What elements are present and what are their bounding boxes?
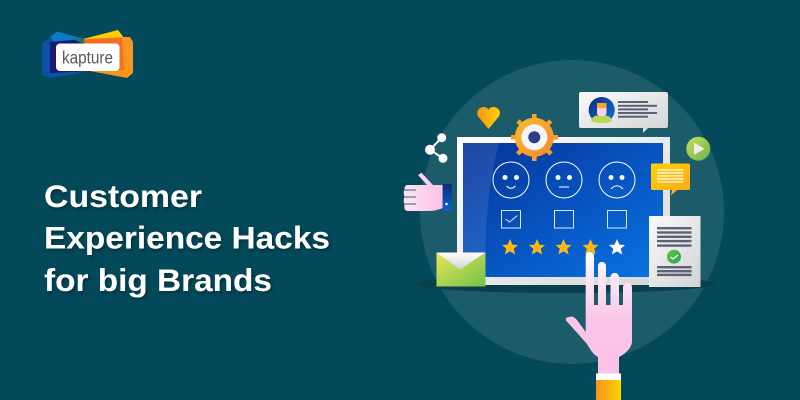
monitor [457, 137, 670, 285]
logo wordmark: kapture [62, 47, 113, 67]
title: for big Brands [44, 262, 272, 298]
check badge [667, 250, 681, 264]
left hand [404, 173, 452, 211]
yellow chat bubble [651, 164, 690, 196]
icon: gear [511, 114, 558, 161]
face: happy [493, 162, 529, 198]
speech bubble with avatar [579, 92, 668, 133]
icon: envelope [436, 252, 486, 286]
face: neutral [546, 162, 582, 198]
icon: share [425, 133, 448, 163]
logo plate [56, 44, 120, 71]
checkbox: empty right [608, 210, 626, 228]
checkbox: empty middle [554, 210, 574, 228]
sleeve [596, 380, 621, 400]
backdrop circle [420, 60, 724, 364]
title: Experience Hacks [44, 220, 330, 256]
star rating [502, 239, 625, 254]
pointing hand [566, 252, 632, 400]
document with check [649, 216, 700, 287]
message lines [618, 101, 657, 118]
ground shadow [415, 275, 715, 293]
cuff [596, 374, 621, 380]
title: Customer [44, 178, 202, 214]
avatar [589, 97, 615, 123]
icon: heart [477, 107, 500, 129]
checkbox: checked [502, 210, 520, 228]
title [44, 178, 330, 298]
icon: play button [686, 137, 710, 161]
sleeve [443, 184, 452, 210]
face: sad [599, 162, 635, 198]
logo: kapture [42, 30, 133, 78]
